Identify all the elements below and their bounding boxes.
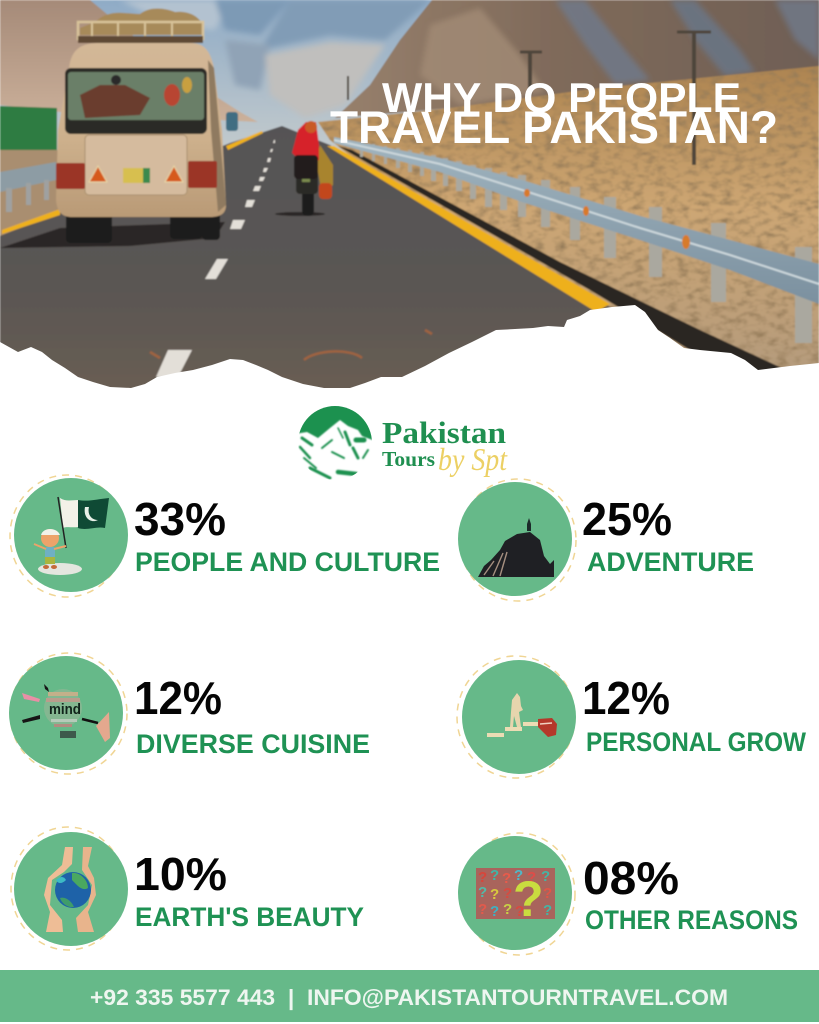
contact text: +92 335 5577 443 | INFO@PAKISTANTOURNTRAVEL.COM	[90, 985, 728, 1010]
green circle	[462, 660, 576, 774]
percentage: 12%	[582, 672, 670, 724]
logo sub wordmark: Tours	[382, 447, 435, 471]
faint orange road marks	[150, 330, 432, 360]
icon: hands holding the globe	[44, 847, 96, 932]
icon: many question marks	[476, 867, 555, 927]
dashed ring	[460, 479, 576, 601]
dashed ring	[463, 833, 575, 955]
guardrail shadow band	[338, 146, 782, 374]
icon: mind bulb and markers	[22, 684, 110, 742]
icon: figure climbing steps held by hand	[487, 693, 557, 737]
icon: many question marks: ?	[543, 902, 552, 919]
warning triangles	[89, 166, 183, 182]
icon: many question marks: ?	[490, 886, 499, 903]
icon: many question marks: ?	[543, 885, 552, 902]
dashed ring	[10, 653, 127, 774]
icon: many question marks: ?	[490, 867, 499, 884]
roof rack with luggage	[78, 8, 203, 43]
stat: other reasons	[458, 833, 798, 955]
footer contact bar	[0, 970, 819, 1022]
desert ground right of the road	[318, 66, 819, 380]
stat: people and culture	[10, 475, 440, 597]
logo by Spt script: by Spt	[438, 441, 508, 477]
green circle	[9, 656, 123, 770]
stat: adventure	[458, 479, 754, 601]
icon: many question marks: ?	[514, 867, 523, 884]
utility poles	[348, 32, 711, 165]
yellow road edges	[2, 131, 610, 312]
guardrail posts	[360, 142, 812, 343]
percentage: 08%	[583, 852, 679, 904]
stat: diverse cuisine	[9, 653, 370, 774]
percentage: 25%	[582, 493, 672, 545]
green circle	[14, 478, 128, 592]
logo: Pakistan Tours by Spt	[295, 404, 508, 478]
panel: hero photo of road through mountains	[0, 0, 819, 400]
label: OTHER REASONS	[585, 905, 798, 935]
icon: many question marks: ?	[502, 870, 511, 887]
logo wordmark: Pakistan	[382, 415, 506, 450]
icon: many question marks: ?	[478, 901, 487, 918]
icon: many question marks: ?	[503, 901, 512, 918]
percentage: 33%	[134, 493, 226, 545]
icon: many question marks: ?	[478, 869, 487, 886]
rear window	[65, 68, 207, 134]
bus side edge	[208, 60, 226, 212]
sky and distant blue mountains	[0, 0, 438, 154]
dashed ring	[11, 827, 125, 950]
label: PEOPLE AND CULTURE	[135, 547, 440, 577]
icon: mind bulb and markers: mind	[49, 701, 81, 718]
green trees on the left	[0, 106, 57, 152]
asphalt road	[0, 126, 650, 400]
icon: many question marks: ?	[490, 903, 499, 920]
bus wheels	[66, 216, 220, 242]
icon: many question marks: ?	[478, 884, 487, 901]
guardrail beam	[334, 137, 819, 304]
label: DIVERSE CUISINE	[136, 729, 370, 759]
green circle	[14, 832, 128, 946]
logo mountain emblem	[295, 404, 375, 478]
center road dashes	[156, 140, 275, 377]
side mirror	[226, 112, 238, 131]
icon: many question marks: ?	[527, 869, 536, 886]
percentage: 12%	[134, 672, 222, 724]
dashed ring	[10, 475, 124, 597]
dashed ring	[457, 656, 575, 778]
number plate	[123, 168, 150, 183]
bus shadow	[0, 222, 225, 248]
icon: many question marks: ?	[503, 885, 512, 902]
bus body	[56, 43, 226, 217]
right big mountain	[335, 0, 819, 118]
title	[330, 74, 778, 153]
left brown mountain	[0, 0, 258, 122]
stat: personal grow	[457, 656, 806, 778]
title line 1: WHY DO PEOPLE	[382, 74, 741, 121]
icon: climber on mountain top	[478, 518, 554, 577]
green circle	[458, 482, 572, 596]
percentage: 10%	[134, 848, 227, 900]
icon: many question marks: ?	[513, 871, 544, 927]
green circle	[458, 836, 572, 950]
icon: boy with Pakistan flag	[34, 497, 109, 575]
title line 2: TRAVEL PAKISTAN?	[330, 102, 778, 153]
tail lights	[56, 161, 217, 189]
tour bus rear	[0, 8, 238, 248]
rear door panel	[85, 135, 187, 195]
label: EARTH'S BEAUTY	[135, 902, 364, 932]
icon: many question marks: ?	[541, 868, 550, 885]
stat: earth's beauty	[11, 827, 364, 950]
motorbike with riders	[275, 121, 333, 216]
icon: many question marks: ?	[515, 903, 524, 920]
label: ADVENTURE	[587, 547, 754, 577]
left roadside ground and guardrail	[0, 150, 60, 240]
